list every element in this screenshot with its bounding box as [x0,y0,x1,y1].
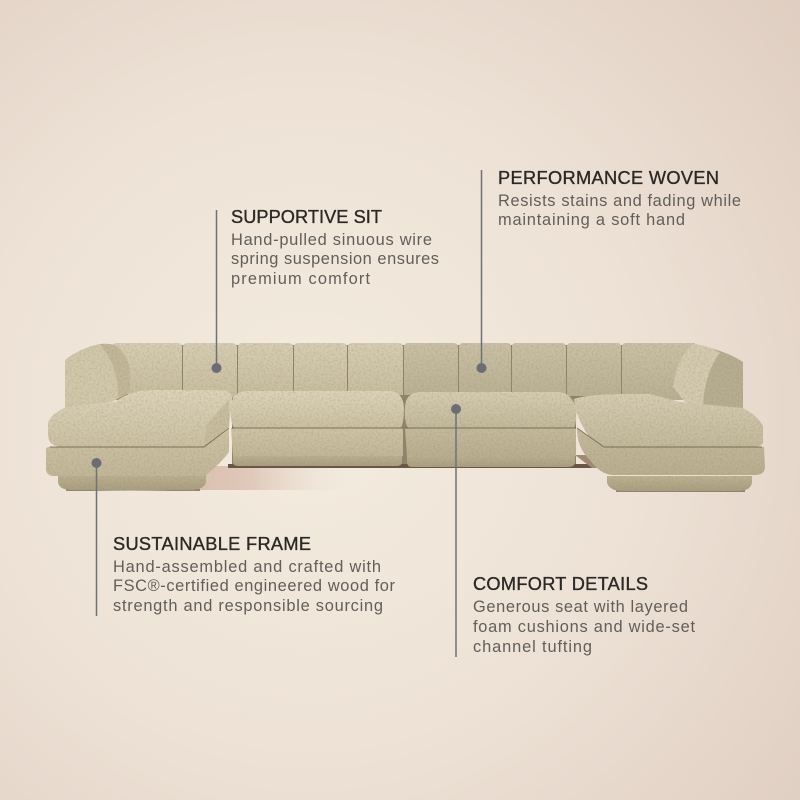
body: comfort details: channel tufting [473,638,592,656]
body: comfort details [473,598,695,656]
heading: sustainable frame: SUSTAINABLE FRAME [113,534,311,554]
body: sustainable frame: strength and responsible sourcing [113,597,383,615]
callout: sustainable frame [92,458,396,616]
body: supportive sit: premium comfort [231,270,370,288]
leader line and dot: sustainable frame [92,458,102,616]
body: sustainable frame: FSC®-certified engineered wood for [113,577,396,595]
right arm [673,344,743,410]
callout: supportive sit [212,207,439,373]
leader line and dot: performance woven [476,170,486,373]
body: supportive sit: spring suspension ensures [231,250,439,268]
right chaise lower [577,428,765,491]
leader line and dot: comfort details [451,404,461,657]
cushion seams [50,428,762,447]
callout: comfort details [451,404,695,657]
sofa base filling the cushion gaps [112,345,692,464]
body: sustainable frame: Hand-assembled and crafted with [113,558,381,576]
left arm [65,344,130,408]
body: comfort details: Generous seat with layered [473,598,688,616]
body: comfort details: foam cushions and wide-set [473,618,695,636]
heading: supportive sit: SUPPORTIVE SIT [231,207,382,227]
heading: performance woven: PERFORMANCE WOVEN [498,168,719,188]
right chaise seat cushion [574,394,763,447]
left chaise lower [46,428,229,490]
floor shadows [66,455,745,492]
body: supportive sit: Hand-pulled sinuous wire [231,231,432,249]
body: performance woven [498,192,741,229]
body: performance woven: maintaining a soft hand [498,211,685,229]
left chaise seat cushion [48,390,232,447]
leader line and dot: supportive sit [212,210,222,373]
body: supportive sit [231,231,439,288]
heading: comfort details: COMFORT DETAILS [473,574,648,594]
sofa [46,343,765,492]
callout: performance woven [476,168,741,373]
body: sustainable frame [113,558,396,615]
middle right seat [405,392,576,467]
middle left seat [231,391,404,466]
body: performance woven: Resists stains and fading while [498,192,741,210]
back cushions [112,343,695,400]
